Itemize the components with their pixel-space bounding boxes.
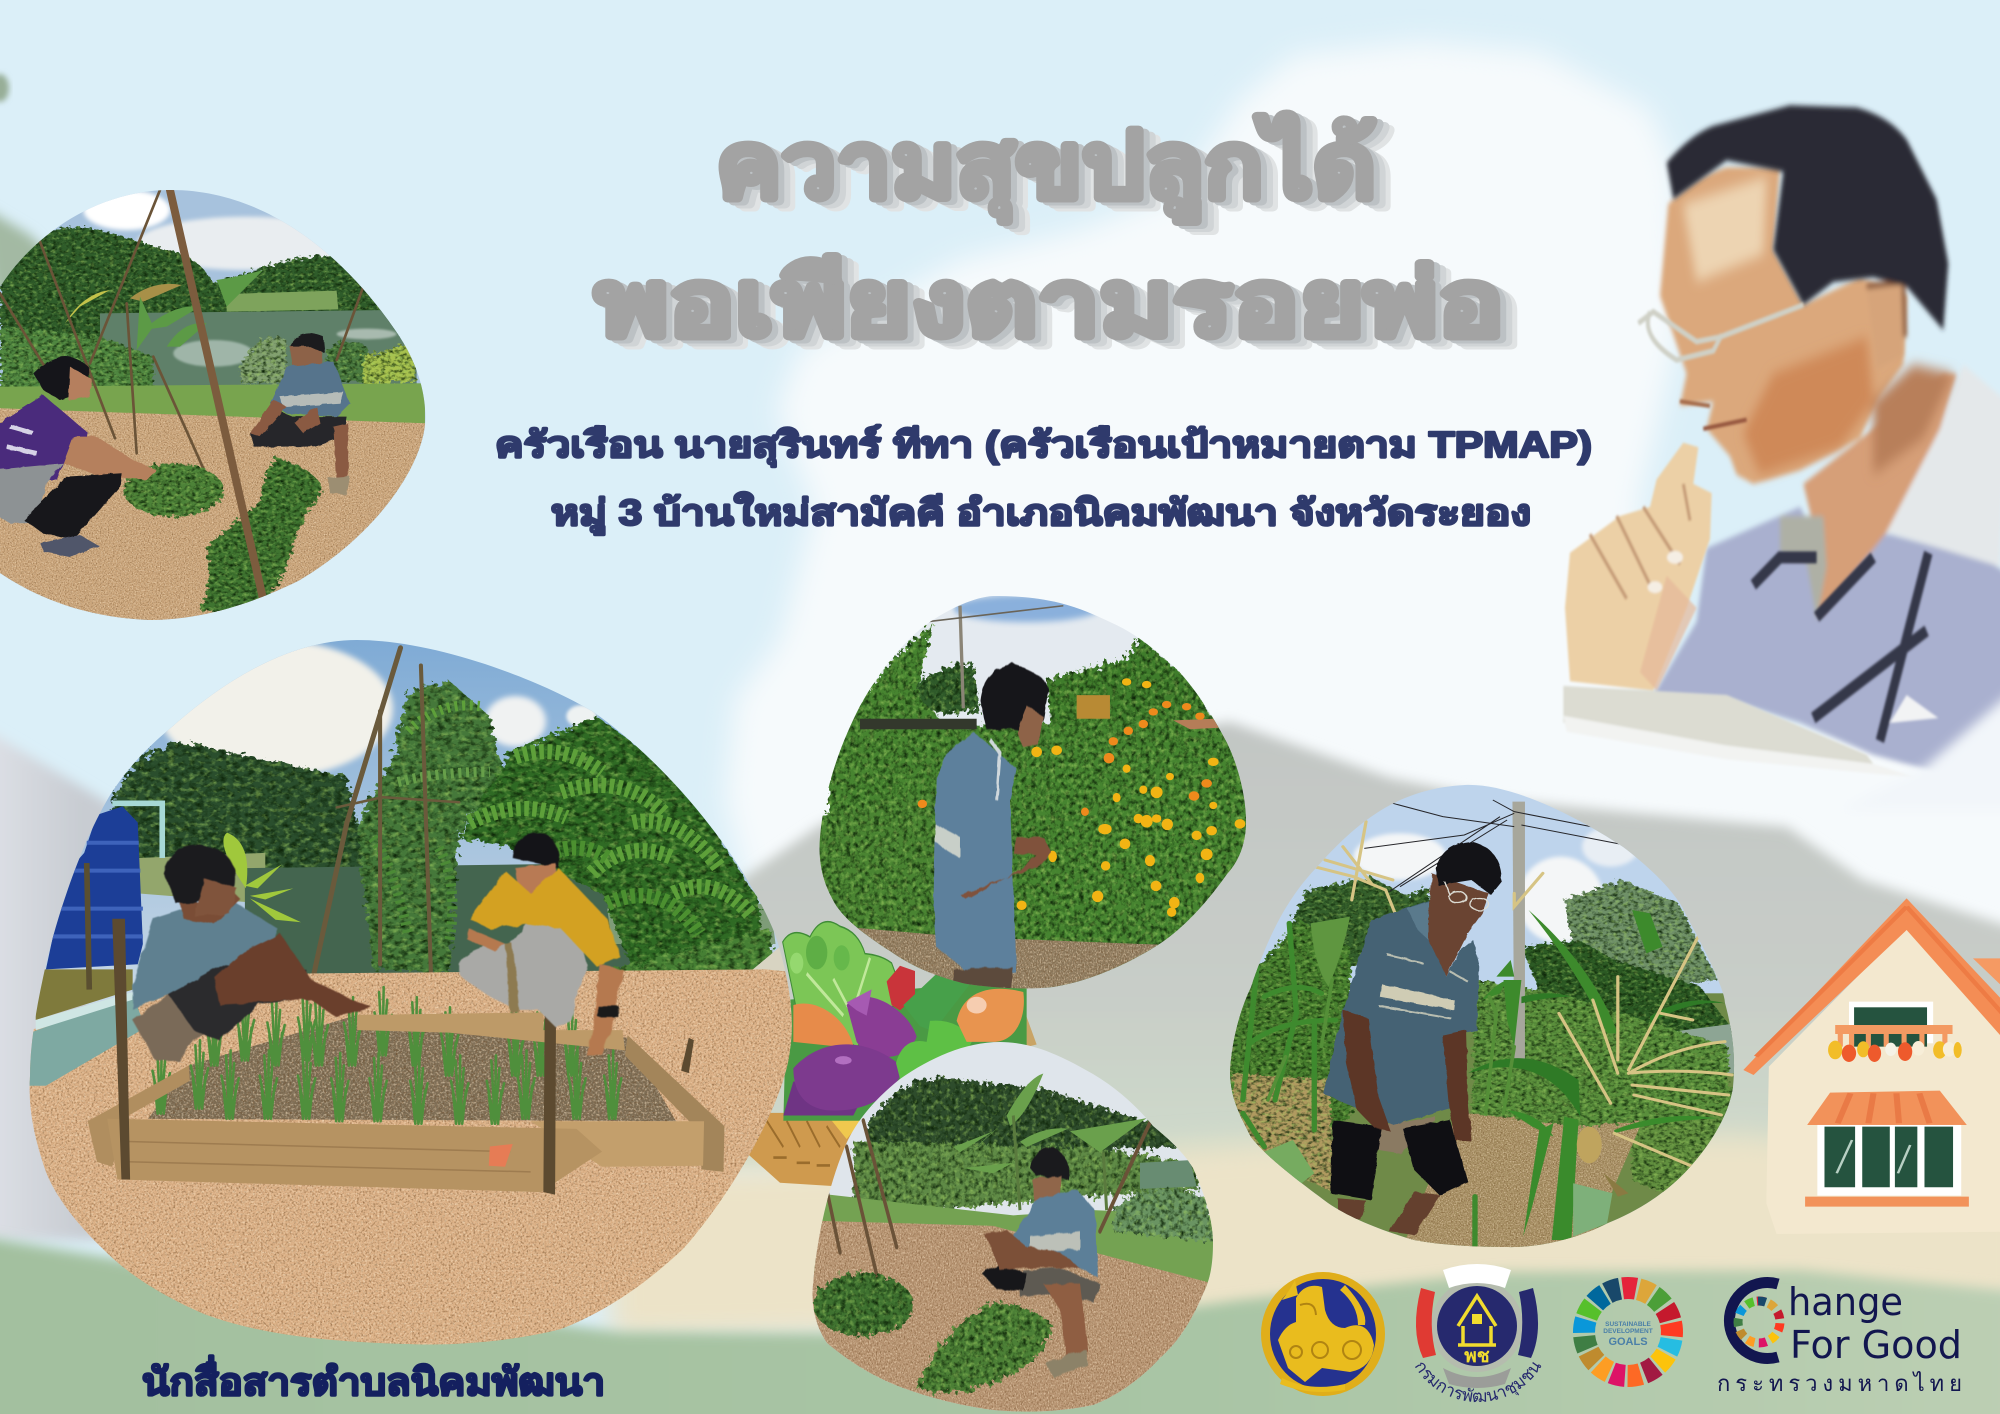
logo: SDG colour wheel bbox=[1566, 1270, 1690, 1394]
logo: Community Development Department: พช bbox=[1464, 1346, 1490, 1367]
photo: couple at the vegetable poles bbox=[0, 190, 426, 620]
SDG centre text: DEVELOPMENT bbox=[1603, 1328, 1653, 1335]
straps bbox=[1753, 553, 1928, 741]
hair bbox=[1667, 105, 1948, 330]
woman in purple shirt bbox=[0, 356, 157, 557]
corn leaves bbox=[1243, 822, 1732, 1247]
credit line: นักสื่อสารตำบลนิคมพัฒนา bbox=[142, 1355, 605, 1404]
man squatting in striped shirt bbox=[250, 333, 350, 495]
man in blue shirt, back view bbox=[933, 664, 1052, 989]
raised bed with sprouts bbox=[88, 919, 724, 1195]
village and district line: หมู่ 3 บ้านใหม่สามัคคี อำเภอนิคมพัฒนา จังหวัดระยอง bbox=[551, 491, 1531, 536]
photo: man in the corn field bbox=[1200, 780, 1760, 1260]
SDG centre text: SUSTAINABLE bbox=[1605, 1321, 1652, 1328]
balcony window bbox=[1828, 1002, 1962, 1062]
illustration: basket of vegetables bbox=[740, 922, 1037, 1186]
logo: Community Development Department bbox=[1415, 1264, 1542, 1402]
man crouching in blue striped shirt bbox=[982, 1147, 1100, 1377]
logo: Change For Good, Ministry of Interior bbox=[1717, 1280, 1962, 1396]
man in striped shirt and black shorts bbox=[1323, 842, 1502, 1235]
neck bbox=[1803, 374, 1957, 617]
paper bbox=[1563, 686, 1873, 764]
photo: two men at a raised onion bed bbox=[30, 640, 792, 1344]
face bbox=[1660, 167, 1907, 484]
logo: Change For Good, Ministry of Interior: hange bbox=[1788, 1280, 1903, 1324]
title: ความสุขปลูกได้ bbox=[716, 113, 1376, 223]
logo: provincial seal bbox=[1261, 1272, 1385, 1396]
title bbox=[595, 113, 1504, 355]
man pointing in grey shirt bbox=[133, 846, 372, 1060]
photo: man among marigolds bbox=[820, 596, 1246, 988]
wall bbox=[1766, 927, 2000, 1234]
lower window bbox=[1817, 1125, 1961, 1196]
shirt bbox=[1653, 507, 2000, 796]
compound leaves on the fruit tree bbox=[469, 752, 750, 934]
glasses bbox=[1638, 305, 1803, 360]
illustration: painted house bbox=[1743, 898, 2000, 1234]
marigold flowers bbox=[918, 679, 1245, 916]
SDG centre text bbox=[1603, 1321, 1653, 1348]
water tank and pipe bbox=[46, 803, 162, 990]
man in yellow shirt bbox=[459, 833, 623, 1055]
logo: Change For Good, Ministry of Interior: For Good bbox=[1790, 1323, 1962, 1367]
household name line: ครัวเรือน นายสุรินทร์ ทีทา (ครัวเรือนเป้าหมายตาม TPMAP) bbox=[495, 424, 1592, 468]
roof bbox=[1743, 898, 2000, 1075]
portrait: the King in thought bbox=[1563, 105, 2000, 810]
awning bbox=[1807, 1091, 1967, 1125]
collar bbox=[1887, 365, 2000, 567]
logo: Change For Good, Ministry of Interior: กระทรวงมหาดไทย bbox=[1717, 1371, 1962, 1396]
hand bbox=[1565, 443, 1712, 690]
photo: man squatting by the pond bbox=[812, 1042, 1213, 1412]
SDG centre text: GOALS bbox=[1608, 1336, 1648, 1348]
curved department name: กรมการพัฒนาชุมชน bbox=[1415, 1362, 1542, 1402]
title: พอเพียงตามรอยพ่อ bbox=[595, 253, 1504, 355]
window sill bbox=[1805, 1197, 1969, 1207]
